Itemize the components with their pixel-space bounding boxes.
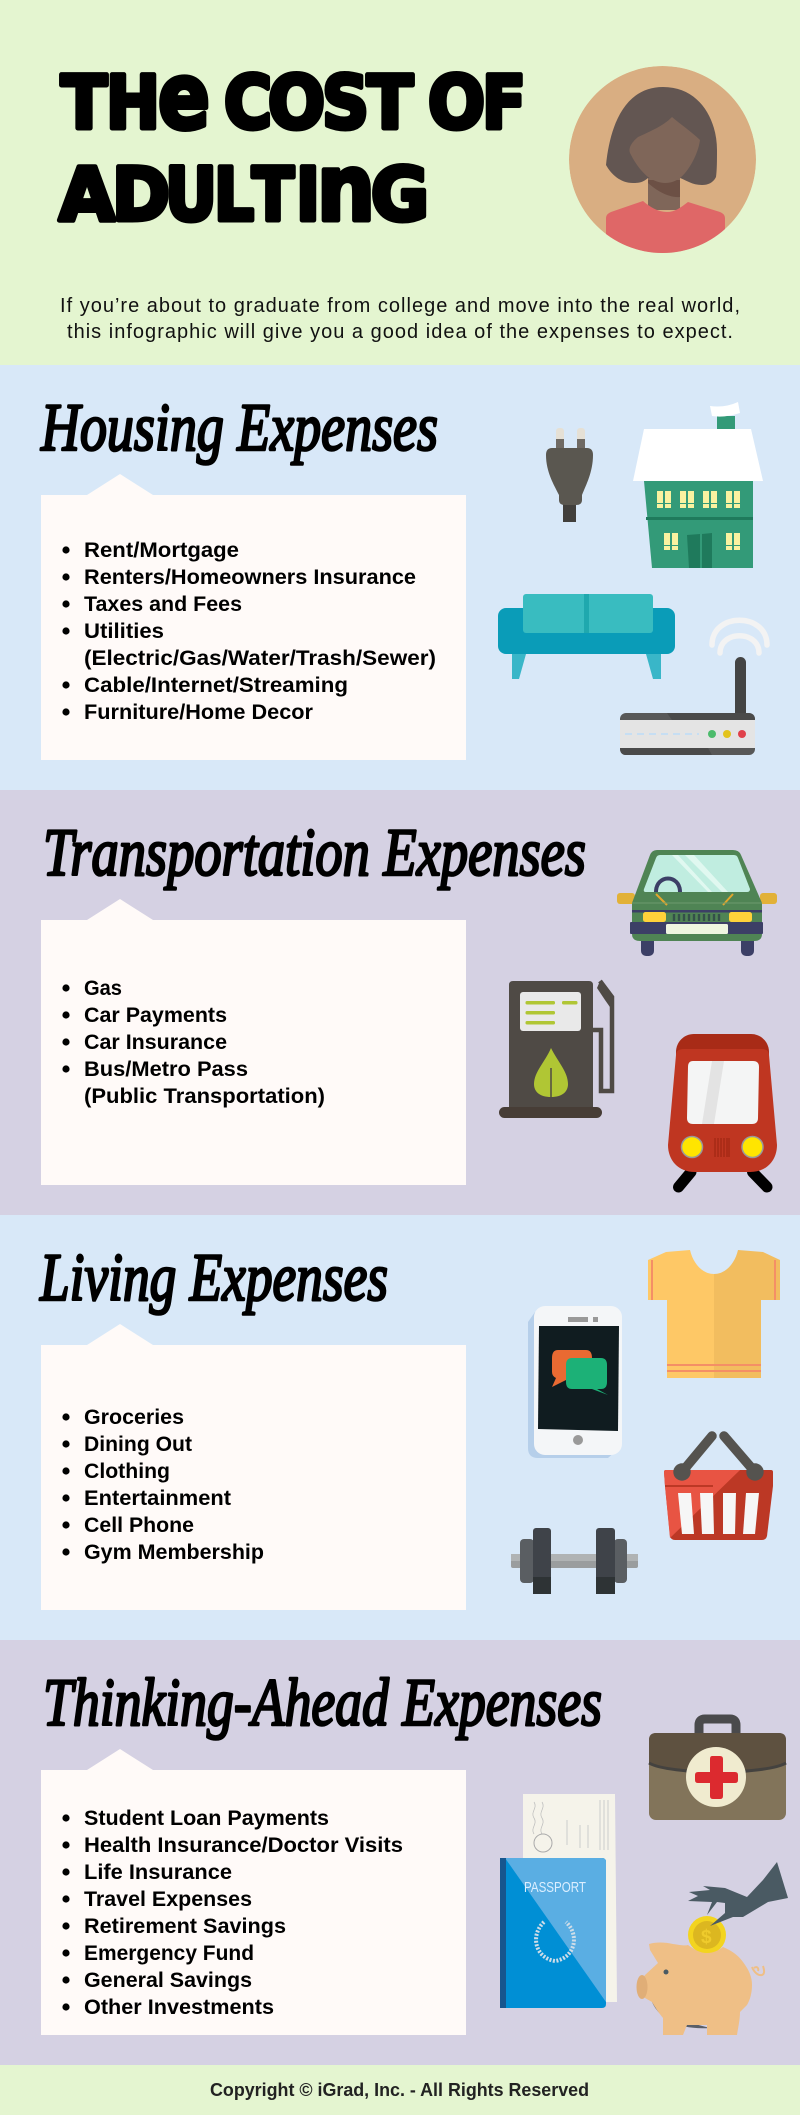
- list card: living: Cell Phone: [84, 1514, 194, 1537]
- title: I: [296, 153, 320, 238]
- title: L: [214, 153, 254, 238]
- list card: thinking-ahead: [41, 1749, 466, 2035]
- icon: woman avatar: [569, 66, 756, 262]
- list card: living: [41, 1324, 466, 1610]
- panel: footer: [0, 2065, 800, 2115]
- title: D: [112, 153, 170, 238]
- title: [59, 43, 526, 242]
- title: S: [322, 61, 369, 146]
- icon: sofa: [498, 594, 675, 679]
- icon: plug: [546, 428, 593, 522]
- heading: thinking-ahead: Thinking-Ahead Expenses: [43, 1664, 602, 1740]
- icon: t-shirt: [648, 1250, 780, 1378]
- list card: housing: Taxes and Fees: [84, 593, 242, 616]
- title: H: [106, 61, 160, 146]
- title: C: [224, 61, 272, 146]
- list card: transportation: (Public Transportation): [84, 1085, 325, 1108]
- list card: thinking-ahead: Life Insurance: [84, 1861, 232, 1884]
- panel: living expenses: [0, 1215, 800, 1640]
- title: G: [371, 153, 429, 238]
- list card: living: Entertainment: [84, 1487, 231, 1510]
- list card: housing: Utilities: [84, 620, 164, 643]
- list card: housing: Rent/Mortgage: [84, 539, 239, 562]
- list card: housing: [41, 474, 466, 760]
- list card: thinking-ahead: Student Loan Payments: [84, 1807, 329, 1830]
- list card: thinking-ahead: Health Insurance/Doctor Visits: [84, 1834, 403, 1857]
- list card: transportation: Gas: [84, 977, 122, 1000]
- title: T: [252, 153, 294, 238]
- icon: piggy bank with coin and hand: [636, 1862, 788, 2035]
- list card: living: Gym Membership: [84, 1541, 264, 1564]
- list card: housing: Furniture/Home Decor: [84, 701, 313, 724]
- list card: living: Clothing: [84, 1460, 170, 1483]
- icon: wifi router: [620, 620, 767, 755]
- icon: passport and ticket: PASSPORT: [524, 1879, 586, 1896]
- intro text: [60, 295, 740, 343]
- icon: passport and ticket: [500, 1794, 617, 2008]
- icon: dumbbell: [511, 1528, 638, 1594]
- panel: header: [56, 66, 756, 342]
- list card: transportation: Bus/Metro Pass: [84, 1058, 248, 1081]
- title: A: [59, 153, 115, 238]
- panel: thinking-ahead expenses: [0, 1640, 800, 2065]
- title: O: [428, 61, 485, 146]
- icon: gas pump: [499, 981, 612, 1118]
- icon: house: [633, 402, 763, 568]
- list card: transportation: [41, 899, 466, 1185]
- list card: thinking-ahead: Travel Expenses: [84, 1888, 252, 1911]
- list card: housing: Cable/Internet/Streaming: [84, 674, 348, 697]
- list card: transportation: Car Insurance: [84, 1031, 227, 1054]
- title: T: [61, 61, 107, 146]
- icon: medical bag: [649, 1719, 786, 1820]
- list card: housing: (Electric/Gas/Water/Trash/Sewer): [84, 647, 436, 670]
- list card: thinking-ahead: Retirement Savings: [84, 1915, 286, 1938]
- list card: transportation: Car Payments: [84, 1004, 227, 1027]
- title: U: [165, 153, 217, 238]
- icon: car: [617, 850, 777, 956]
- list card: thinking-ahead: Other Investments: [84, 1996, 274, 2019]
- list card: thinking-ahead: Emergency Fund: [84, 1942, 254, 1965]
- panel: transportation expenses: [0, 790, 800, 1215]
- title: F: [482, 61, 526, 146]
- icon: shopping basket: [664, 1436, 773, 1540]
- list card: housing: Renters/Homeowners Insurance: [84, 566, 416, 589]
- panel: housing expenses: [0, 365, 800, 790]
- list card: living: Dining Out: [84, 1433, 192, 1456]
- footer copyright text: Copyright © iGrad, Inc. - All Rights Reserved: [210, 2080, 589, 2100]
- list card: thinking-ahead: General Savings: [84, 1969, 252, 1992]
- heading: transportation: Transportation Expenses: [43, 814, 586, 890]
- icon: train: [668, 1034, 777, 1187]
- title: e: [158, 43, 210, 150]
- intro text: If you’re about to graduate from college and move into the real world,: [60, 295, 740, 317]
- list card: living: Groceries: [84, 1406, 184, 1429]
- heading: living: Living Expenses: [39, 1239, 388, 1315]
- icon: piggy bank with coin and hand: $: [701, 1927, 712, 1948]
- title: n: [317, 135, 375, 242]
- title: T: [367, 61, 413, 146]
- heading: housing: Housing Expenses: [40, 389, 438, 465]
- icon: smartphone: [528, 1306, 622, 1458]
- intro text: this infographic will give you a good idea of the expenses to expect.: [67, 321, 733, 343]
- title: O: [268, 61, 325, 146]
